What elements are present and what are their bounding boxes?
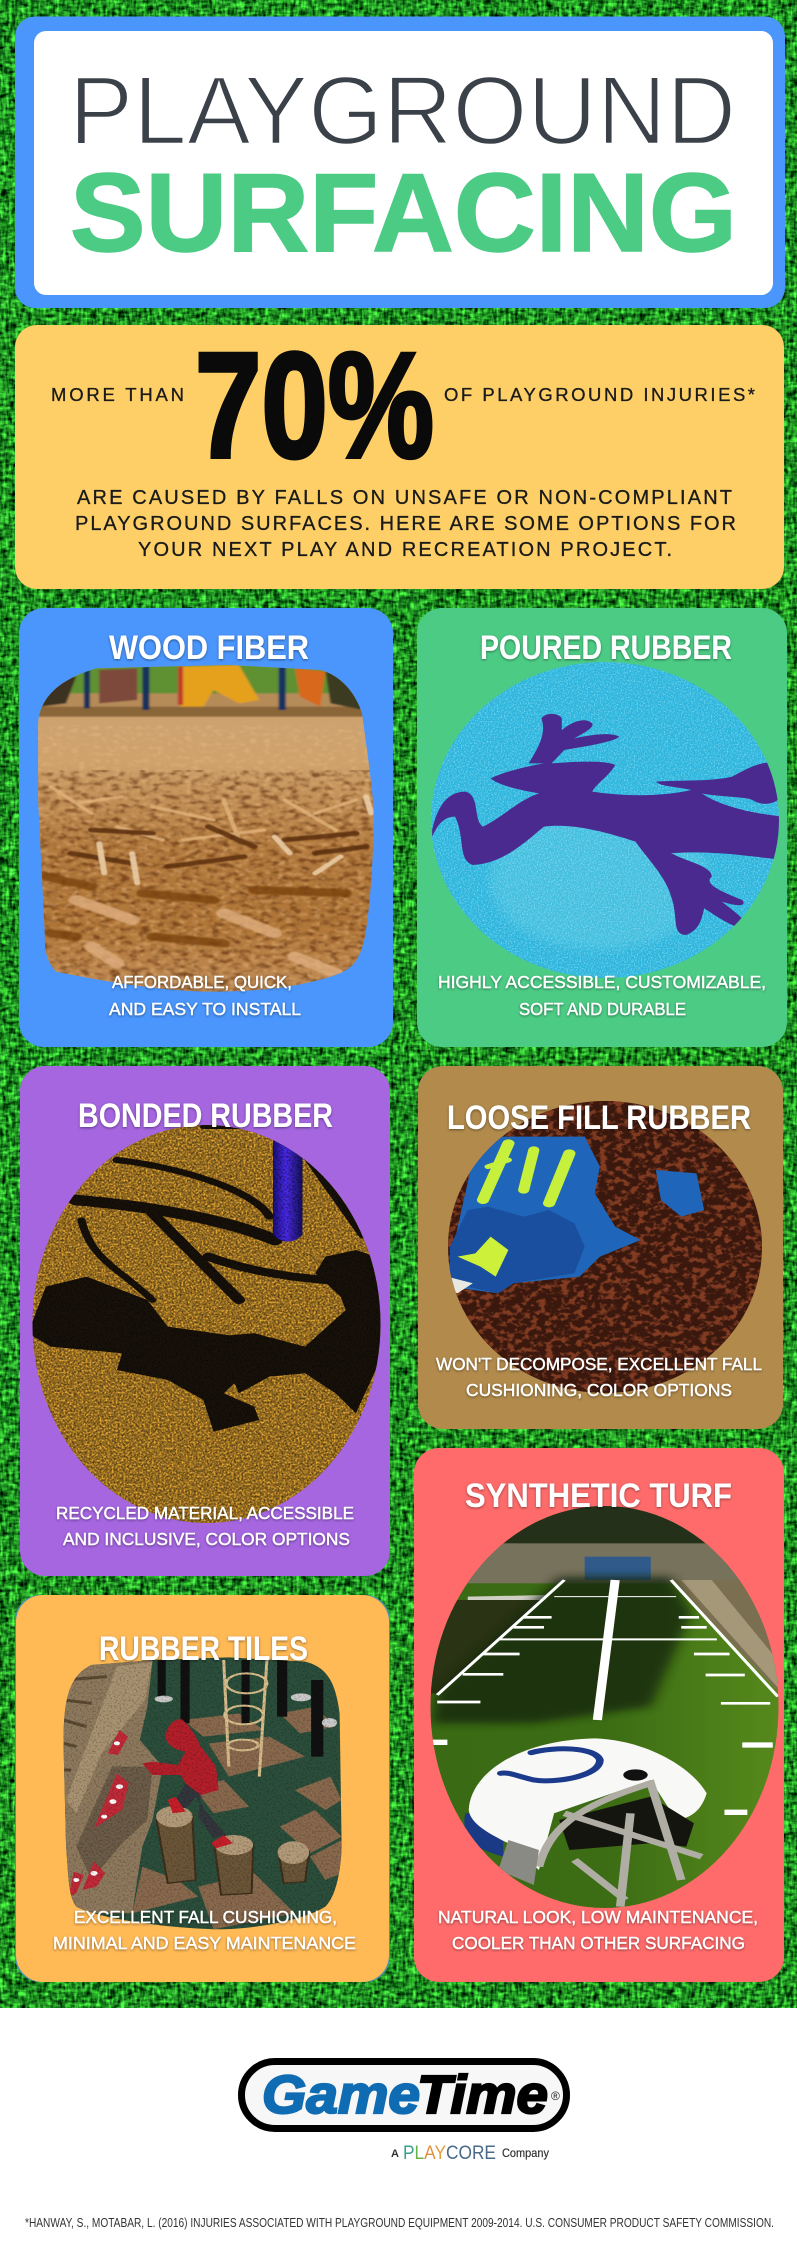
- caption: wood fiber: [109, 972, 301, 1019]
- photo: synthetic turf: [425, 1500, 785, 1915]
- title: synthetic turf: SYNTHETIC TURF: [465, 1477, 732, 1515]
- caption: bonded rubber: AND INCLUSIVE, COLOR OPTIONS: [63, 1529, 350, 1549]
- logo: GameTime: ®: [551, 2089, 560, 2103]
- checker tiles: [132, 1707, 342, 1929]
- logo: a PlayCore company: A: [391, 2148, 399, 2160]
- photo: wood fiber: [30, 660, 380, 1000]
- caption: loose fill rubber: WON'T DECOMPOSE, EXCELLENT FALL: [436, 1354, 762, 1374]
- caption: synthetic turf: COOLER THAN OTHER SURFACING: [452, 1933, 745, 1953]
- logo: a PlayCore company: Company: [502, 2146, 549, 2160]
- field lines: [430, 1580, 778, 1812]
- caption: synthetic turf: [438, 1907, 758, 1953]
- panel: rubber tiles: [15, 1595, 390, 1982]
- title: bonded rubber: BONDED RUBBER: [78, 1097, 333, 1135]
- helmet: [464, 1813, 503, 1857]
- title: loose fill rubber: LOOSE FILL RUBBER: [447, 1099, 751, 1137]
- logo: GameTime: [242, 2062, 566, 2128]
- panel: statistic: [15, 321, 784, 589]
- logo: a PlayCore company: PLAYCORE: [403, 2143, 496, 2164]
- child: [175, 1783, 226, 1838]
- logo: GameTime: Time: [417, 2065, 548, 2125]
- caption: wood fiber: AND EASY TO INSTALL: [109, 999, 301, 1019]
- panel: synthetic turf: [414, 1448, 785, 1982]
- panel: bonded rubber: [20, 1066, 390, 1576]
- footer white band: [0, 2008, 797, 2245]
- heading: playground: PLAYGROUND: [69, 56, 736, 165]
- posts and rope: [158, 1660, 323, 1757]
- caption: wood fiber: AFFORDABLE, QUICK,: [112, 972, 292, 992]
- title: poured rubber: POURED RUBBER: [480, 629, 732, 667]
- blue pole: [273, 1128, 302, 1242]
- text: intro paragraph: PLAYGROUND SURFACES. HERE ARE SOME OPTIONS FOR: [75, 513, 736, 535]
- caption: loose fill rubber: CUSHIONING, COLOR OPTIONS: [466, 1380, 732, 1400]
- big number 70 percent: 70%: [195, 321, 434, 489]
- caption: poured rubber: SOFT AND DURABLE: [519, 999, 686, 1019]
- mushrooms: [69, 1730, 129, 1897]
- shoe: [447, 1137, 641, 1293]
- frog silhouette: [432, 714, 783, 935]
- face mask: [559, 1797, 694, 1850]
- caption: poured rubber: HIGHLY ACCESSIBLE, CUSTOMIZABLE,: [438, 972, 766, 992]
- caption: rubber tiles: MINIMAL AND EASY MAINTENANCE: [53, 1933, 356, 1953]
- caption: rubber tiles: [53, 1907, 356, 1953]
- text: intro paragraph: YOUR NEXT PLAY AND RECREATION PROJECT.: [138, 539, 672, 561]
- text: intro paragraph: [75, 487, 736, 561]
- panel: wood fiber: [19, 608, 393, 1047]
- photo: bonded rubber: [28, 1120, 386, 1530]
- logo: a PlayCore company: [391, 2143, 549, 2164]
- trees and background: [500, 1506, 710, 1546]
- caption: bonded rubber: RECYCLED MATERIAL, ACCESSIBLE: [56, 1503, 354, 1523]
- photo: poured rubber: [425, 655, 785, 985]
- caption: loose fill rubber: [436, 1354, 762, 1400]
- panel: title: [15, 16, 785, 308]
- logo: GameTime: Game: [262, 2065, 420, 2125]
- panel: poured rubber: [417, 608, 787, 1047]
- photo: loose fill rubber: [440, 1095, 770, 1400]
- panel: loose fill rubber: [418, 1066, 783, 1429]
- text: more than: MORE THAN: [51, 384, 184, 405]
- text: of playground injuries: OF PLAYGROUND INJURIES*: [444, 384, 755, 405]
- title: rubber tiles: RUBBER TILES: [99, 1630, 308, 1668]
- caption: synthetic turf: NATURAL LOOK, LOW MAINTENANCE,: [438, 1907, 758, 1927]
- heading: surfacing: SURFACING: [70, 151, 737, 275]
- caption: rubber tiles: EXCELLENT FALL CUSHIONING,: [74, 1907, 337, 1927]
- photo: rubber tiles: [60, 1650, 350, 1935]
- logs: [157, 1815, 309, 1895]
- caption: bonded rubber: [56, 1503, 354, 1549]
- caption: poured rubber: [438, 972, 766, 1019]
- rock wall: [61, 1660, 163, 1913]
- title: wood fiber: WOOD FIBER: [109, 629, 309, 667]
- text: intro paragraph: ARE CAUSED BY FALLS ON UNSAFE OR NON-COMPLIANT: [77, 487, 732, 509]
